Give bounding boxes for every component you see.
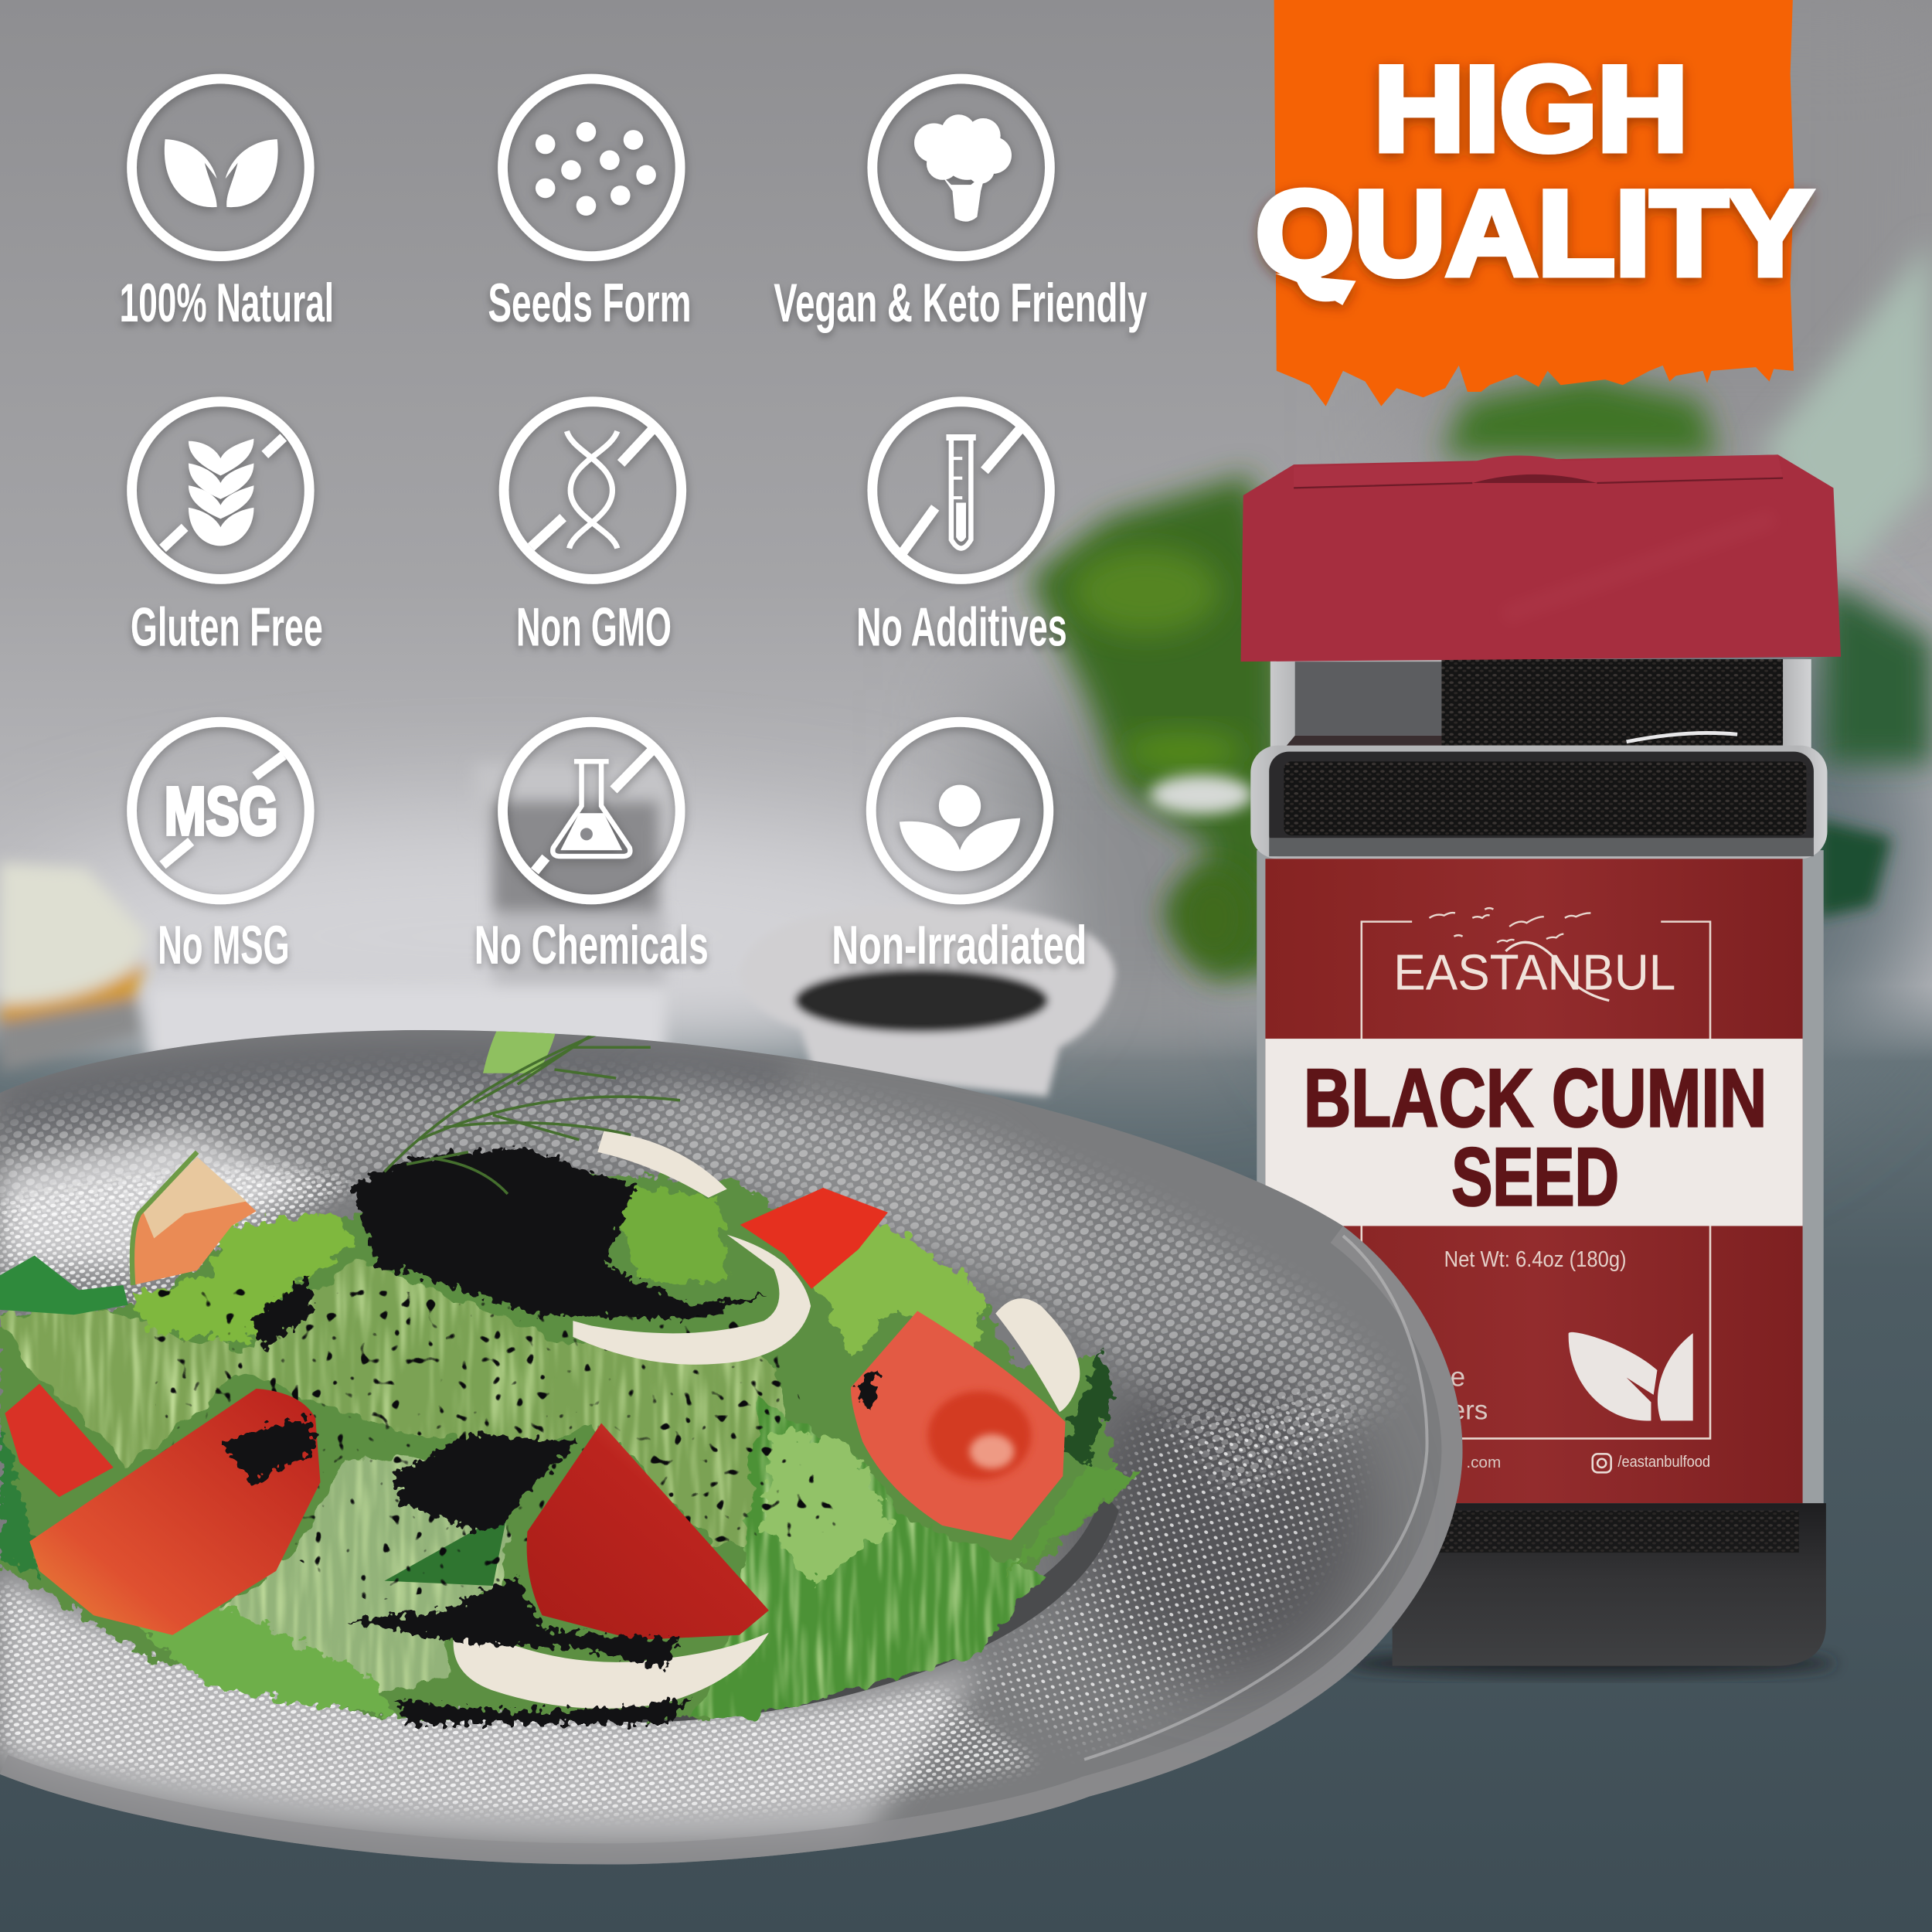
- product name line 1: BLACK CUMIN: [1304, 1051, 1767, 1144]
- dill sprig: [384, 1029, 680, 1194]
- product name line 2: SEED: [1451, 1130, 1619, 1223]
- label: Non GMO: Non GMO: [516, 596, 672, 657]
- icon: no MSG: [132, 722, 309, 900]
- lettuce base: [0, 1004, 1140, 1719]
- tomato wedges: [5, 1152, 1066, 1640]
- white band: [1265, 1039, 1803, 1226]
- instagram icon: [1593, 1454, 1611, 1472]
- blurred oil dish on left: [0, 862, 148, 1072]
- label: Non-Irradiated: Non-Irradiated: [832, 914, 1087, 975]
- blurred glass shaker: [148, 764, 678, 1060]
- label: No Additives: No Additives: [856, 596, 1067, 657]
- label frame: [1362, 922, 1710, 1438]
- icon row 2: [132, 402, 1049, 579]
- black seed clusters: [222, 1147, 877, 1724]
- icon: no MSG: MSG: [165, 773, 278, 849]
- jar shadow: [1343, 1651, 1836, 1675]
- net weight: Net Wt: 6.4oz (180g): [1444, 1247, 1627, 1272]
- icon: broccoli vegan keto: [872, 79, 1049, 257]
- brand name: EASTANBUL: [1393, 944, 1675, 1000]
- instagram handle: /eastanbulfood: [1617, 1454, 1710, 1471]
- label: 100% Natural: 100% Natural: [120, 272, 334, 333]
- Q tail swash: [1275, 274, 1356, 305]
- plate rim highlight: [0, 1226, 1463, 1864]
- jar body glass: [1257, 850, 1824, 1528]
- icon: non GMO DNA: [504, 402, 682, 579]
- partly hidden text: e: [1451, 1362, 1465, 1393]
- hammered texture: [0, 1064, 1393, 1821]
- icon: no chemicals flask: [503, 722, 680, 900]
- icon row 1: [132, 79, 1049, 257]
- onion rings: [454, 1131, 1080, 1709]
- icon: non-irradiated radura: [871, 722, 1049, 900]
- icon row 3: [132, 722, 1049, 900]
- product jar: [1241, 454, 1841, 1675]
- label: No MSG: No MSG: [158, 914, 290, 975]
- label: Seeds Form: Seeds Form: [488, 272, 691, 333]
- jar lid: [1241, 454, 1841, 662]
- website fragment: .com: [1466, 1454, 1501, 1471]
- label: Gluten Free: Gluten Free: [131, 596, 323, 657]
- label: No Chemicals: No Chemicals: [474, 914, 709, 975]
- blurred cup of black seeds: [740, 906, 1115, 1097]
- lower seed layer: [1393, 1503, 1826, 1666]
- scattered seeds on lettuce: [148, 1281, 850, 1602]
- label: Vegan & Keto Friendly: Vegan & Keto Friendly: [774, 272, 1147, 333]
- icon: gluten free wheat: [132, 402, 309, 579]
- high quality banner: [1256, 0, 1812, 406]
- brand swoosh: [1505, 942, 1609, 1001]
- banner heading line 2: QUALITY: [1256, 167, 1812, 301]
- upper seed layer: [1250, 659, 1827, 859]
- blurred green plant behind jar: [1029, 376, 1932, 980]
- banner heading: [1256, 43, 1812, 305]
- jar label: [1265, 859, 1803, 1503]
- plate: [0, 1022, 1466, 1872]
- banner heading line 1: HIGH: [1374, 43, 1688, 177]
- brand birds: [1429, 908, 1590, 943]
- blurred glass bottle top right: [1762, 240, 1932, 579]
- icon: no additives test tube: [872, 402, 1049, 579]
- plate tonal areas: [0, 1038, 1368, 1844]
- salad: [0, 1004, 1140, 1724]
- partly hidden text 2: ers: [1451, 1396, 1488, 1426]
- icon: 100% natural leaves: [132, 79, 309, 257]
- bowl well shadow: [641, 1491, 1119, 1723]
- icon: seeds form: [503, 79, 680, 257]
- label leaf icon: [1569, 1332, 1693, 1420]
- torn orange banner: [1274, 0, 1794, 406]
